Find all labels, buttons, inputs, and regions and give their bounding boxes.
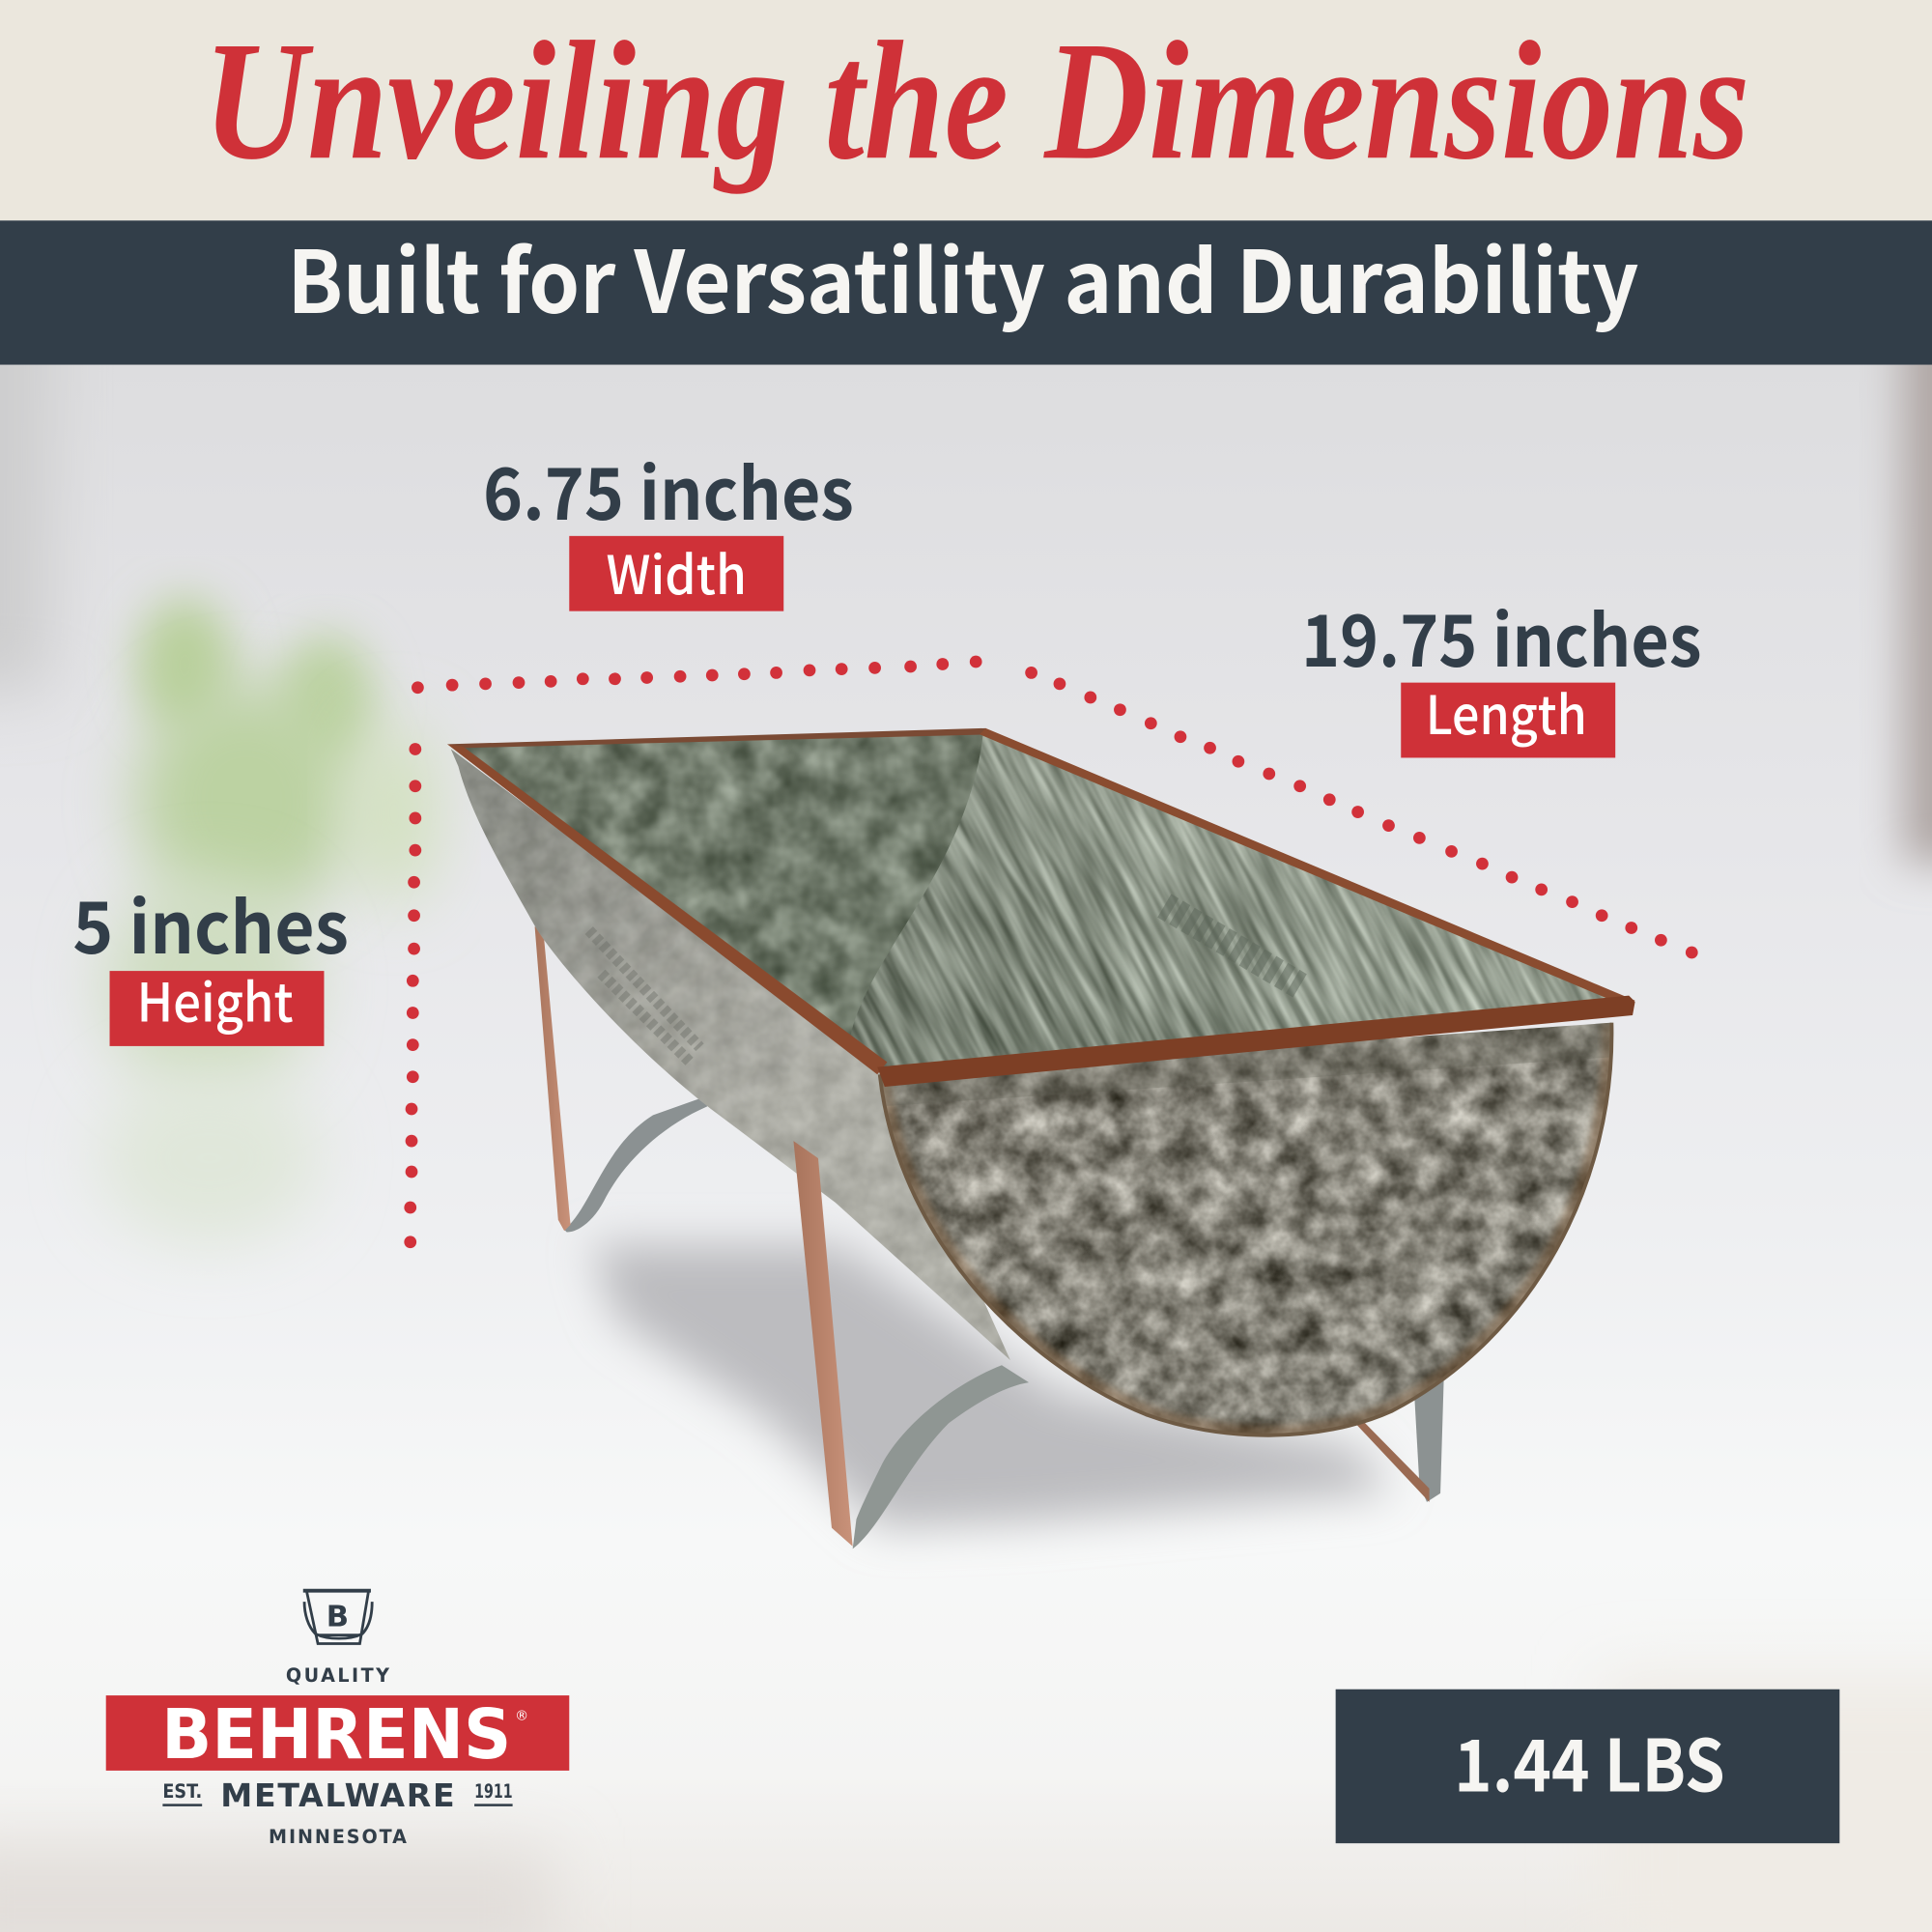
rim — [447, 728, 1635, 1087]
quality: QUALITY — [286, 1664, 390, 1687]
width tag: Width — [607, 532, 747, 610]
floor shadow — [591, 1244, 1392, 1528]
side wall — [443, 739, 1023, 1368]
red banner: ® — [515, 1709, 528, 1724]
icon: bucket — [303, 1591, 372, 1644]
weight callout: 1.44 LBS — [1454, 1710, 1725, 1813]
logo: Behrens Metalware — [106, 1591, 569, 1848]
length tag: Length — [1426, 672, 1587, 750]
height measurement: 5 inches — [72, 871, 349, 975]
length measurement: 19.75 inches — [1301, 584, 1701, 688]
subtitle: Built for Versatility and Durability — [287, 213, 1638, 338]
embossed side marking — [589, 930, 699, 1062]
icon: bucket: B — [327, 1601, 349, 1634]
front left leg — [793, 1141, 1029, 1548]
dotted line: width — [412, 656, 982, 694]
1911: 1911 — [474, 1780, 513, 1803]
weight callout — [1336, 1690, 1839, 1843]
trough product — [447, 728, 1635, 1549]
dotted line: length — [1025, 667, 1698, 958]
length measurement — [1301, 584, 1701, 757]
1911 — [474, 1780, 513, 1806]
width tag — [569, 532, 783, 611]
end face — [877, 1022, 1613, 1437]
interior far wall — [851, 736, 1605, 1066]
embossed interior marking — [1164, 906, 1300, 985]
subtitle band — [0, 213, 1932, 365]
width measurement: 6.75 inches — [483, 438, 854, 541]
back left leg — [535, 926, 712, 1233]
est: EST. — [162, 1780, 202, 1803]
interior — [465, 734, 1605, 1066]
metalware: METALWARE — [220, 1776, 455, 1814]
header band — [0, 0, 1932, 220]
dotted line: height — [404, 743, 421, 1248]
red banner: BEHRENS — [161, 1694, 511, 1775]
height tag: Height — [137, 959, 294, 1037]
height measurement — [72, 871, 349, 1046]
back right leg — [1351, 1370, 1444, 1502]
width measurement — [483, 438, 854, 611]
minnesota: MINNESOTA — [269, 1826, 407, 1848]
